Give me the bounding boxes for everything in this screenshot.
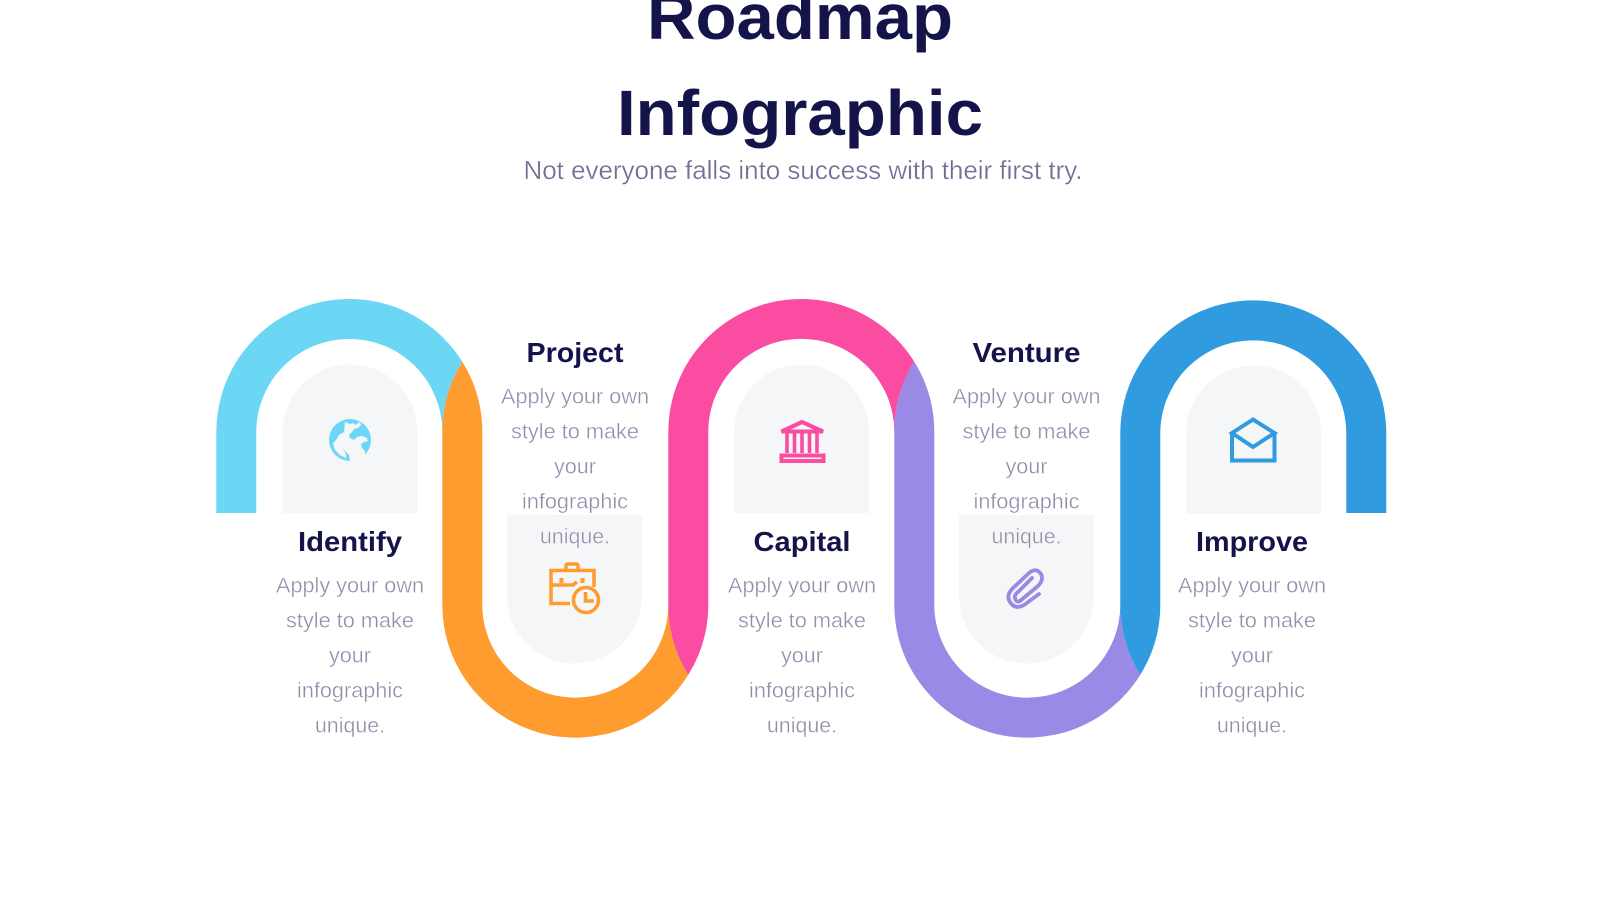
step: identify: Apply your own <box>276 574 424 598</box>
step: venture: style to make <box>962 420 1090 444</box>
step: venture: Venture <box>972 337 1080 368</box>
icon: briefcase with clock <box>551 564 598 612</box>
step: venture: your <box>1006 454 1048 478</box>
step: identify: style to make <box>286 608 414 632</box>
step: identify <box>276 526 424 738</box>
panel: identify background <box>282 364 418 513</box>
step: venture: infographic <box>974 490 1080 514</box>
step: improve: unique. <box>1217 714 1287 738</box>
panel: project background <box>507 515 642 664</box>
step: improve <box>1178 526 1326 738</box>
step: capital: style to make <box>738 608 866 632</box>
step: capital <box>728 526 876 738</box>
icon: bank building <box>782 422 824 461</box>
step: venture <box>952 337 1100 548</box>
segment: blue arch <box>1120 300 1386 675</box>
step: identify: your <box>329 644 371 668</box>
title <box>617 0 983 149</box>
title: Infographic <box>617 77 983 149</box>
step: venture: Apply your own <box>952 384 1100 408</box>
panel: improve background <box>1186 365 1321 514</box>
step: project: your <box>554 454 596 478</box>
segment: pink arch <box>668 299 914 675</box>
roadmap ribbon <box>216 299 1386 738</box>
step: capital: unique. <box>767 714 837 738</box>
step: project: Apply your own <box>501 384 649 408</box>
step: improve: infographic <box>1199 678 1305 702</box>
step: project: style to make <box>511 420 639 444</box>
icon: globe <box>329 419 371 463</box>
step: project: Project <box>526 337 624 368</box>
step: project <box>501 337 649 548</box>
step: identify: unique. <box>315 714 385 738</box>
step: capital: infographic <box>749 678 855 702</box>
step: identify: Identify <box>298 526 402 557</box>
step: project: unique. <box>540 524 610 548</box>
step: capital: your <box>781 644 823 668</box>
step: improve: Apply your own <box>1178 574 1326 598</box>
step: improve: Improve <box>1196 526 1308 557</box>
icon: paperclip <box>1008 570 1042 607</box>
panel: venture background <box>959 515 1094 664</box>
step: venture: unique. <box>992 524 1062 548</box>
step: capital: Capital <box>754 526 850 557</box>
step: capital: Apply your own <box>728 574 876 598</box>
subtitle: Not everyone falls into success with their first try. <box>524 155 1082 185</box>
segment: purple u-bend <box>894 362 1140 738</box>
step: identify: infographic <box>297 678 403 702</box>
step: project: infographic <box>522 490 628 514</box>
step: improve: your <box>1231 644 1273 668</box>
panel: capital background <box>734 364 869 513</box>
segment: orange u-bend <box>442 362 688 738</box>
segment: light blue arch <box>216 299 462 513</box>
icon: open envelope <box>1232 420 1274 460</box>
step: improve: style to make <box>1188 608 1316 632</box>
